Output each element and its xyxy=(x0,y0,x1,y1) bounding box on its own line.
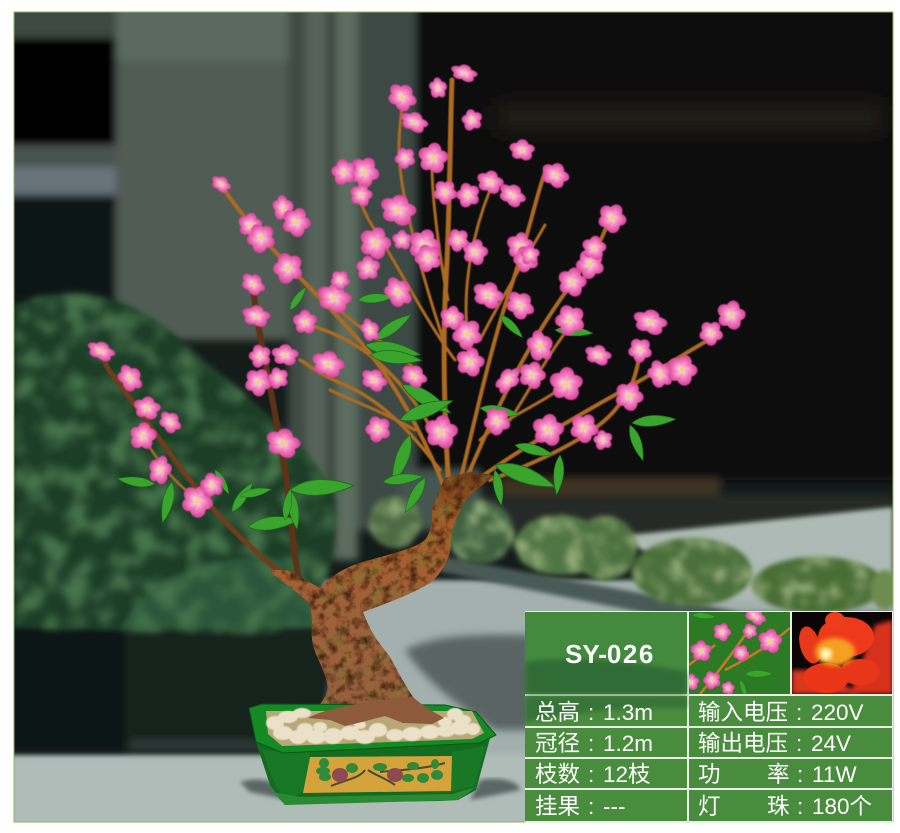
spec: power: : xyxy=(797,762,803,787)
curb xyxy=(440,555,892,611)
spec: branch count: 12枝 xyxy=(603,762,651,787)
spec: crown diameter: 1.2m xyxy=(603,731,653,756)
left hedge xyxy=(14,294,336,635)
spec: branch count: 枝数 xyxy=(535,762,580,787)
spec: power: 11W xyxy=(812,762,857,787)
spec: crown diameter: : xyxy=(588,731,594,756)
spec: output voltage: : xyxy=(796,731,802,756)
bonsai pot xyxy=(249,697,496,805)
flowers xyxy=(82,61,750,526)
spec: total height: 总高 xyxy=(535,700,580,725)
branches xyxy=(103,80,712,592)
pot foot band xyxy=(273,787,476,805)
spec: LED beads: : xyxy=(797,794,803,819)
spec rows xyxy=(525,696,892,821)
spec: total height: : xyxy=(588,700,594,725)
spec: crown diameter: 冠径 xyxy=(535,731,580,756)
product detail photo: lit blossom xyxy=(792,612,893,694)
trunk xyxy=(268,472,495,727)
spec: fruit: : xyxy=(588,794,594,819)
trunk base over gravel xyxy=(308,697,444,726)
spec: LED beads: 珠 xyxy=(767,794,790,819)
spec: LED beads: 180个 xyxy=(812,794,872,819)
spec: input voltage: 220V xyxy=(811,700,864,725)
spec: output voltage: 输出电压 xyxy=(698,731,788,756)
white gravel xyxy=(266,708,480,744)
spec: fruit: 挂果 xyxy=(535,794,580,819)
pot body xyxy=(256,738,490,805)
spec: output voltage: 24V xyxy=(811,731,851,756)
dark base left of trunk xyxy=(14,656,328,758)
model title cell: SY-026 xyxy=(565,639,655,669)
spec: fruit: --- xyxy=(603,794,625,819)
spec: total height: 1.3m xyxy=(603,700,653,725)
spec: input voltage: : xyxy=(796,700,802,725)
spec: input voltage: 输入电压 xyxy=(698,700,788,725)
model title cell xyxy=(525,612,687,694)
spec: branch count: : xyxy=(588,762,594,787)
leaves xyxy=(117,285,676,533)
pot rim xyxy=(249,704,496,753)
pot shading xyxy=(262,746,486,800)
ground xyxy=(0,507,900,833)
decorated panel xyxy=(303,756,452,793)
product detail photo: blossom branch xyxy=(689,612,790,694)
spec: LED beads: 灯 xyxy=(698,794,721,819)
right hedge row xyxy=(369,496,899,622)
pot inner xyxy=(266,711,484,746)
spec: power: 功 xyxy=(698,762,721,787)
peach blossom bonsai xyxy=(82,61,750,727)
faint building glow xyxy=(495,105,885,130)
white grid backing xyxy=(525,611,893,823)
product spec panel xyxy=(525,603,893,823)
blurred street scene xyxy=(0,0,900,560)
spec: power: 率 xyxy=(767,762,790,787)
pot shadow xyxy=(240,779,520,800)
